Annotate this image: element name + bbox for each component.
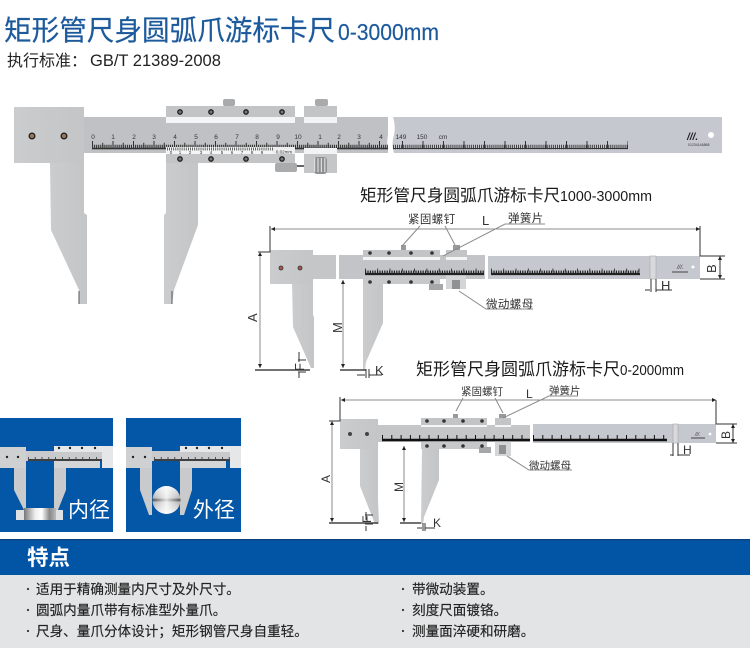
scale numbers: 8 — [255, 134, 259, 141]
slider body: 3 — [200, 150, 203, 155]
labels: 1000-3000: K — [375, 363, 384, 378]
label: inner diameter: 内径 — [68, 499, 110, 522]
features heading: 特点 — [27, 546, 70, 570]
features right column: 测量面淬硬和研磨。 — [412, 624, 534, 639]
labels: 1000-3000: L — [482, 213, 489, 228]
features left column: 尺身、量爪分体设计；矩形钢管尺身自重轻。 — [36, 624, 308, 640]
scale numbers: cm — [439, 134, 447, 141]
features left column — [27, 582, 308, 640]
features band — [0, 539, 750, 575]
labels: 0-2000: F — [360, 516, 374, 523]
slider body: 4 — [210, 150, 213, 155]
fine adjustment unit — [275, 99, 337, 174]
fixed jaw — [50, 163, 87, 304]
scale numbers: 2 — [337, 134, 341, 141]
slider body: 9 — [261, 150, 264, 155]
labels: 0-2000: L — [526, 387, 533, 401]
slider body: 5 — [221, 150, 224, 155]
labels: 1000-3000: 微动螺母 — [486, 297, 534, 311]
logo mark: 01234146868 — [688, 143, 709, 147]
fixed jaw head — [14, 107, 84, 163]
labels: 1000-3000: M — [330, 322, 345, 333]
features right column: 刻度尺面镀铬。 — [412, 602, 507, 618]
scale numbers — [91, 134, 447, 141]
scale numbers: 150 — [417, 134, 428, 141]
logo mark: ///. — [686, 132, 698, 143]
heading: 1000-3000: 1000-3000mm — [560, 189, 652, 205]
beam — [84, 117, 722, 153]
diagram: 1000-3000 caliper: ///. — [676, 265, 684, 271]
scale numbers: 6 — [214, 134, 218, 141]
features panel — [0, 575, 750, 648]
standard text: GB/T 21389-2008 — [90, 52, 221, 70]
scale numbers: 149 — [396, 134, 407, 141]
scale numbers: 3 — [357, 134, 361, 141]
heading: 1000-3000 — [360, 186, 652, 205]
head screws — [29, 133, 67, 139]
labels: 1000-3000: A — [245, 313, 260, 322]
labels: 0-2000 — [319, 384, 733, 530]
labels: 1000-3000: 弹簧片 — [508, 211, 544, 225]
panel: inner diameter — [0, 418, 113, 532]
logo mark — [686, 132, 714, 147]
slider body: 6 — [231, 150, 234, 155]
labels: 1000-3000 — [245, 211, 719, 378]
diagram: 0-2000 caliper — [340, 414, 716, 524]
scale numbers: 2 — [132, 134, 136, 141]
slider body: 0 — [170, 150, 173, 155]
scale numbers: 10 — [294, 134, 302, 141]
scale numbers: 1 — [111, 134, 115, 141]
scale numbers: 9 — [276, 134, 280, 141]
slider body: 1 — [179, 150, 182, 155]
diagram: 0-2000 caliper: ///. — [694, 432, 701, 438]
panel: outer diameter — [126, 418, 241, 532]
features left column: 圆弧内量爪带有标准型外量爪。 — [36, 603, 226, 618]
heading: 0-2000: 0-2000mm — [620, 363, 684, 379]
scale numbers: 4 — [173, 134, 177, 141]
labels: 1000-3000: H — [661, 278, 670, 293]
diagram: 1000-3000 caliper — [270, 245, 700, 370]
features right column: 带微动装置。 — [412, 582, 494, 597]
title: 矩形管尺身圆弧爪游标卡尺 — [4, 15, 335, 46]
slider body: 0.02mm — [276, 150, 292, 154]
labels: 0-2000: H — [683, 443, 692, 457]
standard text: 执行标准： — [7, 53, 87, 70]
labels: 0-2000: 紧固螺钉 — [461, 386, 503, 398]
labels: 1000-3000: 紧固螺钉 — [408, 213, 456, 226]
slider body — [166, 99, 295, 163]
labels: 0-2000: A — [319, 475, 333, 483]
labels: 1000-3000: F — [292, 363, 307, 371]
features right column — [402, 582, 534, 639]
dimensions: 1000-3000 — [255, 224, 725, 378]
labels: 0-2000: 微动螺母 — [529, 459, 571, 472]
labels: 1000-3000: B — [704, 264, 719, 273]
heading: 0-2000: 矩形管尺身圆弧爪游标卡尺 — [416, 360, 620, 379]
features left column: 适用于精确测量内尺寸及外尺寸。 — [36, 582, 240, 597]
slider body: 8 — [251, 150, 254, 155]
slider body: 2 — [189, 150, 192, 155]
jaw tip highlights — [79, 291, 172, 304]
main scale — [92, 145, 628, 148]
sliding jaw — [164, 163, 198, 304]
scale numbers: 4 — [379, 134, 383, 141]
scale numbers: 7 — [235, 134, 239, 141]
main caliper illustration — [14, 99, 722, 304]
dimensions: 0-2000 — [329, 396, 737, 531]
scale numbers: 5 — [194, 134, 198, 141]
labels: 0-2000: B — [719, 431, 733, 439]
title: 0-3000mm — [338, 19, 439, 45]
scale numbers: 0 — [91, 134, 95, 141]
heading: 1000-3000: 矩形管尺身圆弧爪游标卡尺 — [360, 186, 560, 205]
label: outer diameter: 外径 — [193, 499, 235, 522]
scale numbers: 1 — [318, 134, 322, 141]
labels: 0-2000: K — [433, 516, 441, 530]
labels: 0-2000: 弹簧片 — [549, 384, 580, 397]
labels: 0-2000: M — [392, 482, 406, 492]
slider body: 7 — [241, 150, 244, 155]
scale numbers: 3 — [152, 134, 156, 141]
